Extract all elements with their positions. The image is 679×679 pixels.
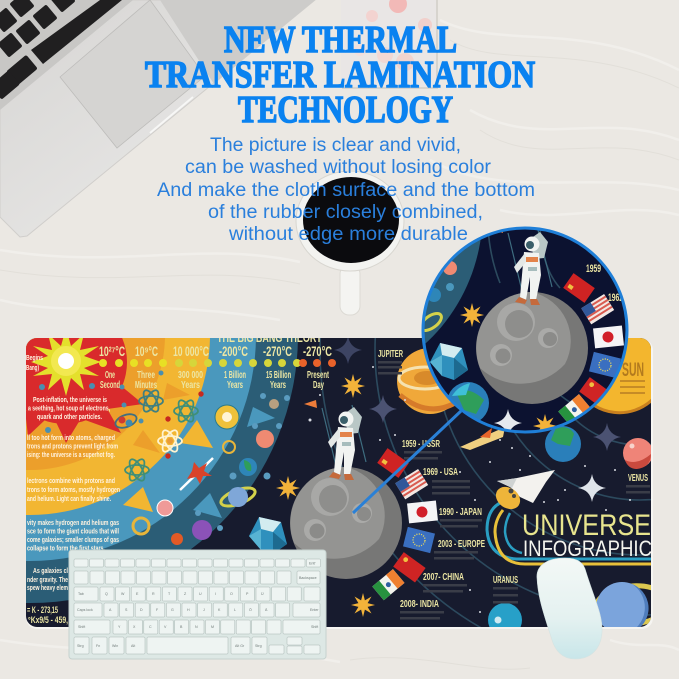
notebook — [341, 0, 438, 89]
row 3: R — [152, 592, 155, 596]
laptop keyboard deck — [0, 0, 133, 110]
paragraph: gravity: sce to form the giant clouds that will — [27, 526, 119, 536]
laptop — [0, 0, 315, 237]
row 6: Strg — [255, 644, 262, 648]
paragraph: post-inflation: a seething, hot soup of electrons, — [28, 404, 110, 412]
title: TRANSFER LAMINATION — [145, 54, 535, 96]
title: TECHNOLOGY — [238, 89, 453, 131]
laptop hinge area — [160, 0, 315, 84]
paragraph: too hot: ising: the universe is a superhot fog. — [27, 450, 115, 459]
timeline labels: space flight — [400, 438, 485, 610]
row 3: Q — [105, 592, 108, 596]
row 6: Alt Gr — [235, 644, 245, 648]
row 6: Alt — [131, 644, 135, 648]
timeline labels: space flight: 1959 - USSR — [402, 438, 440, 450]
mouse — [537, 558, 602, 659]
lens: teal band — [424, 240, 480, 344]
row 5: Y — [118, 625, 121, 629]
planet: earth — [545, 426, 581, 462]
desk mat — [26, 338, 653, 629]
mat title: universe infographic: INFOGRAPHIC — [523, 536, 652, 561]
paragraph: gravity: come galaxies; smaller clumps of gas — [27, 535, 119, 544]
body text: can be washed without losing color — [185, 157, 492, 178]
row 3: Z — [184, 592, 187, 596]
yellow sun burst — [31, 338, 100, 396]
row 3: O — [230, 592, 233, 596]
body text: The picture is clear and vivid, — [210, 135, 461, 156]
row 4: S — [125, 608, 128, 612]
temperature formulas — [27, 605, 68, 625]
temperature labels: 10⁹°C — [135, 343, 158, 359]
paragraph: gravity: vity makes hydrogen and helium gas — [27, 518, 119, 527]
connector line from moon to magnifier — [353, 411, 461, 513]
row 3: U — [199, 592, 202, 596]
row 4: Ä — [265, 608, 268, 612]
row 4 — [74, 603, 320, 617]
row 4: F — [156, 608, 159, 612]
planet: sun — [594, 338, 651, 414]
lens: planets and stars — [424, 261, 556, 430]
row 5: B — [180, 625, 183, 629]
row 4: Caps lock — [77, 608, 93, 612]
lens: year labels: 1959 — [586, 263, 601, 275]
row 2 — [74, 571, 320, 584]
timeline dots — [99, 359, 336, 367]
body text: without edge more durable — [228, 224, 468, 245]
temperature labels — [100, 346, 332, 356]
timeline labels: space flight: 2008- INDIA — [400, 598, 439, 610]
planet: venus: VENUS — [628, 473, 648, 484]
row 6: Win — [112, 644, 118, 648]
moon, astronaut and flags — [290, 400, 438, 600]
temperature labels: -270°C — [303, 343, 332, 359]
timeline labels: space flight: 1990 - JAPAN — [439, 506, 482, 518]
row 5: C — [149, 625, 152, 629]
row 3 — [74, 587, 320, 601]
paragraph: atoms form — [27, 476, 120, 503]
title: NEW THERMAL — [224, 19, 457, 61]
time labels: Years — [181, 380, 200, 391]
side caption: Bang) — [26, 363, 39, 372]
row 5 — [74, 620, 320, 634]
magnified detail circle — [418, 225, 632, 438]
time labels: Minutes — [135, 380, 157, 391]
time labels: 1 Billion — [224, 370, 246, 381]
planet: venus — [623, 438, 653, 494]
row 1 — [74, 559, 320, 567]
temperature labels: -270°C — [263, 343, 292, 359]
comet — [460, 427, 505, 450]
paragraph: post-inflation — [28, 395, 110, 421]
radial time bands — [26, 338, 298, 603]
row 1: Entf — [309, 562, 315, 566]
row 6 — [74, 637, 320, 654]
side caption — [26, 354, 43, 372]
body text: And make the cloth surface and the bottom — [157, 180, 535, 201]
row 4: H — [187, 608, 190, 612]
paragraph: post-inflation: Post-inflation, the universe is — [33, 395, 107, 404]
temperature formulas: = K - 273,15 — [27, 605, 58, 615]
coffee cup — [296, 171, 404, 315]
temperature formulas: °Kx9/5 - 459, — [28, 615, 68, 625]
row 3: I — [215, 592, 216, 596]
orbit lines — [319, 338, 651, 627]
planet: uranus — [488, 576, 522, 627]
lens: moon, astronaut, flags — [476, 225, 624, 425]
laptop spacebar and keys — [0, 0, 122, 100]
mat title: universe infographic: UNIVERSE — [522, 509, 651, 542]
paragraph: too hot: ll too hot form into atoms, charged — [27, 433, 115, 442]
timeline labels: space flight: 2007- CHINA — [423, 571, 464, 583]
body text — [157, 135, 535, 245]
rainbow arc under the shuttle — [487, 503, 652, 564]
planet: uranus: URANUS — [493, 575, 518, 586]
time labels: 300 000 — [178, 370, 203, 381]
title — [145, 19, 535, 131]
row 6: Strg — [77, 644, 84, 648]
planet: neptune with ring — [596, 582, 651, 627]
row 3: E — [136, 592, 139, 596]
keyboard — [69, 550, 326, 659]
row 4: J — [203, 608, 205, 612]
gem — [249, 517, 287, 550]
time labels: Years — [270, 380, 286, 391]
paragraph: gravity: collapse to form the first stars. — [27, 544, 105, 552]
temperature labels: -200°C — [219, 343, 248, 359]
paragraph: atoms form: trons to form atoms, mostly hydrogen — [27, 485, 120, 494]
row 4: A — [109, 608, 112, 612]
row 5: Shift — [311, 625, 318, 629]
timeline labels: space flight: 1969 - USA — [423, 466, 458, 478]
timeline caption bars — [400, 451, 482, 620]
temperature labels: 10²⁷°C — [99, 343, 125, 359]
trackpad — [60, 0, 205, 148]
band decorations — [39, 370, 290, 545]
row 3: Ü — [261, 592, 264, 596]
row 4: K — [218, 608, 221, 612]
time labels: Years — [227, 380, 243, 391]
row 3: T — [168, 592, 171, 596]
paragraph: gravity — [27, 518, 119, 552]
timeline labels: space flight: 2003 - EUROPE — [438, 538, 485, 550]
row 2: Backspace — [299, 576, 317, 580]
lens: orbit lines — [488, 230, 570, 402]
paragraph: post-inflation: quark and other particles. — [37, 412, 102, 421]
lens: year labels — [586, 264, 622, 301]
paragraph: too hot — [27, 433, 118, 459]
paragraph: atoms form: and helium. Light can finally shine. — [27, 494, 111, 503]
planet: jupiter: JUPITER — [378, 349, 403, 360]
row 5: Shift — [78, 625, 85, 629]
row 3: W — [121, 592, 125, 596]
row 5: V — [164, 625, 167, 629]
timeline heading: THE BIG BANG THEORY — [217, 330, 322, 345]
time labels — [100, 370, 329, 391]
temperature labels: 10 000°C — [173, 343, 209, 359]
planet: jupiter — [378, 348, 455, 414]
side caption: Begins — [26, 353, 43, 362]
time labels: One — [105, 370, 115, 381]
row 3: Tab — [78, 592, 84, 596]
row 4: G — [171, 608, 174, 612]
paragraph: atoms form: lectrons combine with protons and — [27, 476, 115, 485]
space shuttle — [496, 470, 555, 510]
row 5: M — [211, 625, 214, 629]
paragraph: galaxies: spew heavy elem — [27, 583, 68, 592]
mat title: universe infographic — [524, 514, 651, 556]
row 3: P — [246, 592, 249, 596]
time labels: Present — [307, 370, 329, 381]
row 4: Enter — [310, 608, 319, 612]
time labels: 15 Billion — [266, 370, 291, 381]
body text: of the rubber closely combined, — [208, 202, 483, 223]
row 4: L — [234, 608, 236, 612]
row 4: Ö — [249, 608, 252, 612]
paragraph: too hot: trons and protons prevent light from — [27, 442, 118, 450]
star ornaments — [276, 336, 621, 617]
time labels: Three — [137, 370, 155, 381]
row 6: Fn — [96, 644, 100, 648]
lens: year labels: 1962 — [608, 292, 623, 304]
row 4: D — [140, 608, 143, 612]
time labels: Day — [313, 380, 324, 391]
laptop front lip — [150, 97, 193, 133]
row 5: N — [195, 625, 198, 629]
paragraph: galaxies: nder gravity. The — [27, 575, 68, 584]
red big bang burst — [26, 338, 143, 443]
planet: sun: SUN — [622, 360, 644, 381]
row 5: X — [133, 625, 136, 629]
paragraph: galaxies: As galaxies cl — [33, 566, 68, 575]
star specks — [308, 366, 631, 629]
time labels: Second — [100, 380, 120, 391]
paragraph: galaxies — [27, 566, 68, 592]
